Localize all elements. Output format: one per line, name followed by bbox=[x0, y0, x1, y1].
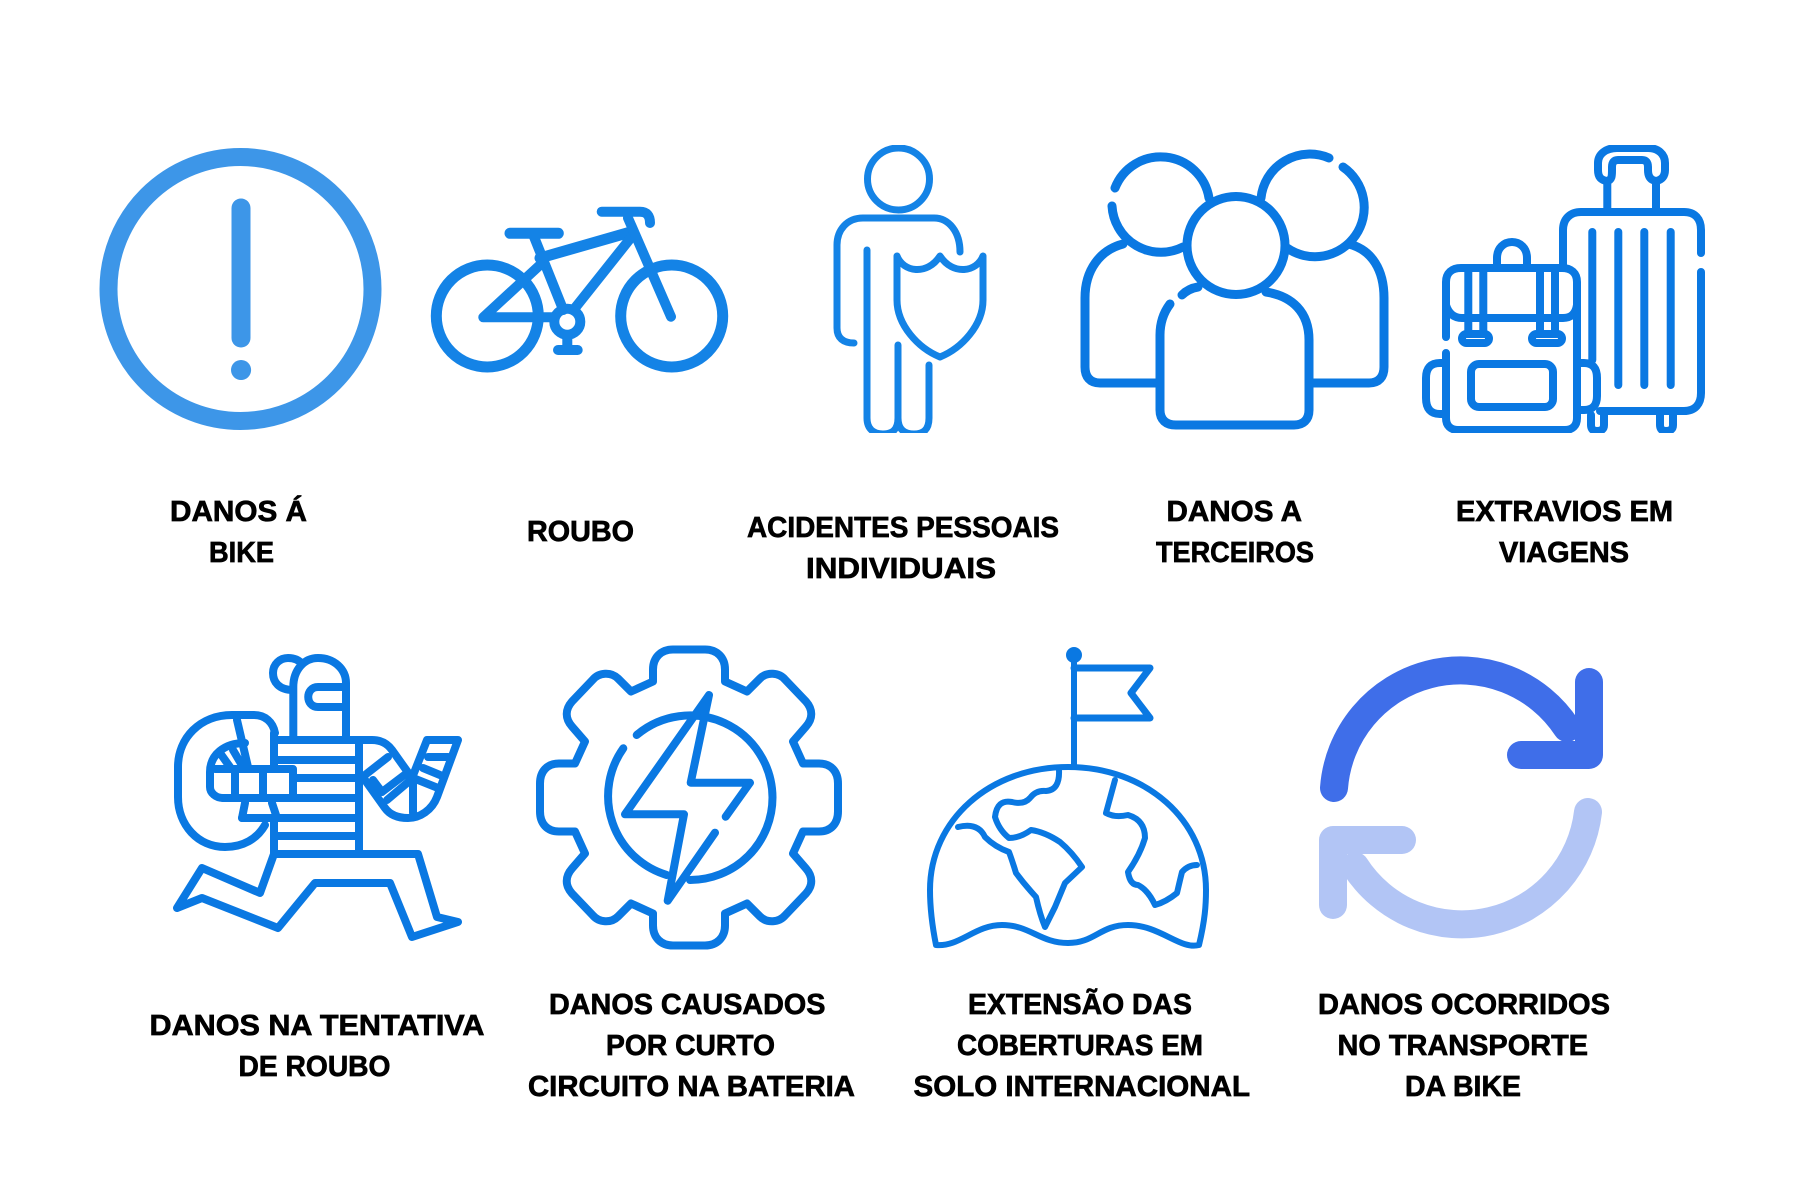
label: extravios em viagens: VIAGENS bbox=[1499, 537, 1629, 569]
label: danos a bike: DANOS Á bbox=[170, 494, 307, 528]
icon: person with shield bbox=[837, 148, 983, 434]
panel: extensao das coberturas bbox=[914, 650, 1250, 1103]
label: extensao das coberturas: COBERTURAS EM bbox=[957, 1030, 1203, 1062]
label: danos a terceiros: TERCEIROS bbox=[1156, 537, 1314, 569]
icon: refresh arrows bbox=[1333, 670, 1589, 924]
icon: globe with flag bbox=[930, 650, 1206, 946]
icon: bicycle bbox=[436, 212, 723, 367]
label: acidentes pessoais: INDIVIDUAIS bbox=[806, 553, 996, 585]
panel: extravios em viagens bbox=[1426, 148, 1701, 569]
label: danos a terceiros: DANOS A bbox=[1166, 496, 1302, 528]
label: danos na tentativa de roubo bbox=[150, 1010, 485, 1083]
panel: danos no transporte bbox=[1318, 670, 1610, 1103]
panel: curto circuito na bateria bbox=[528, 650, 855, 1103]
label: danos no transporte bbox=[1318, 989, 1610, 1103]
label: curto circuito na bateria: DANOS CAUSADOS bbox=[549, 989, 826, 1021]
icon: running thief bbox=[177, 658, 458, 937]
icon: exclamation circle bbox=[108, 157, 372, 421]
label: curto circuito na bateria: CIRCUITO NA BATERIA bbox=[528, 1071, 855, 1103]
panel: roubo bbox=[436, 212, 723, 548]
label: acidentes pessoais: ACIDENTES PESSOAIS bbox=[747, 512, 1059, 544]
label: curto circuito na bateria: POR CURTO bbox=[606, 1030, 775, 1062]
label: extensao das coberturas: EXTENSÃO DAS bbox=[968, 987, 1192, 1021]
panel: acidentes pessoais bbox=[747, 148, 1059, 585]
icon: luggage and backpack bbox=[1426, 148, 1701, 431]
label: danos a bike bbox=[170, 494, 307, 569]
label: roubo: ROUBO bbox=[527, 516, 634, 548]
label: acidentes pessoais bbox=[747, 512, 1059, 585]
label: danos no transporte: DANOS OCORRIDOS bbox=[1318, 989, 1610, 1021]
label: danos no transporte: DA BIKE bbox=[1405, 1071, 1521, 1103]
panel: danos a terceiros bbox=[1085, 154, 1384, 569]
label: extravios em viagens: EXTRAVIOS EM bbox=[1456, 496, 1673, 528]
label: danos na tentativa de roubo: DANOS NA TENTATIVA bbox=[150, 1010, 485, 1042]
label: danos a terceiros bbox=[1156, 496, 1314, 569]
label: extravios em viagens bbox=[1456, 496, 1673, 569]
icon: three people bbox=[1085, 154, 1384, 425]
panel: danos na tentativa de roubo bbox=[150, 658, 485, 1083]
label: extensao das coberturas: SOLO INTERNACIONAL bbox=[914, 1071, 1250, 1103]
label: curto circuito na bateria bbox=[528, 989, 855, 1103]
label: extensao das coberturas bbox=[914, 987, 1250, 1103]
icon: gear with lightning bolt bbox=[540, 650, 838, 946]
label: danos no transporte: NO TRANSPORTE bbox=[1338, 1030, 1588, 1062]
label: danos a bike: BIKE bbox=[209, 537, 274, 569]
label: danos na tentativa de roubo: DE ROUBO bbox=[238, 1051, 390, 1083]
panel: danos a bike bbox=[108, 157, 372, 569]
